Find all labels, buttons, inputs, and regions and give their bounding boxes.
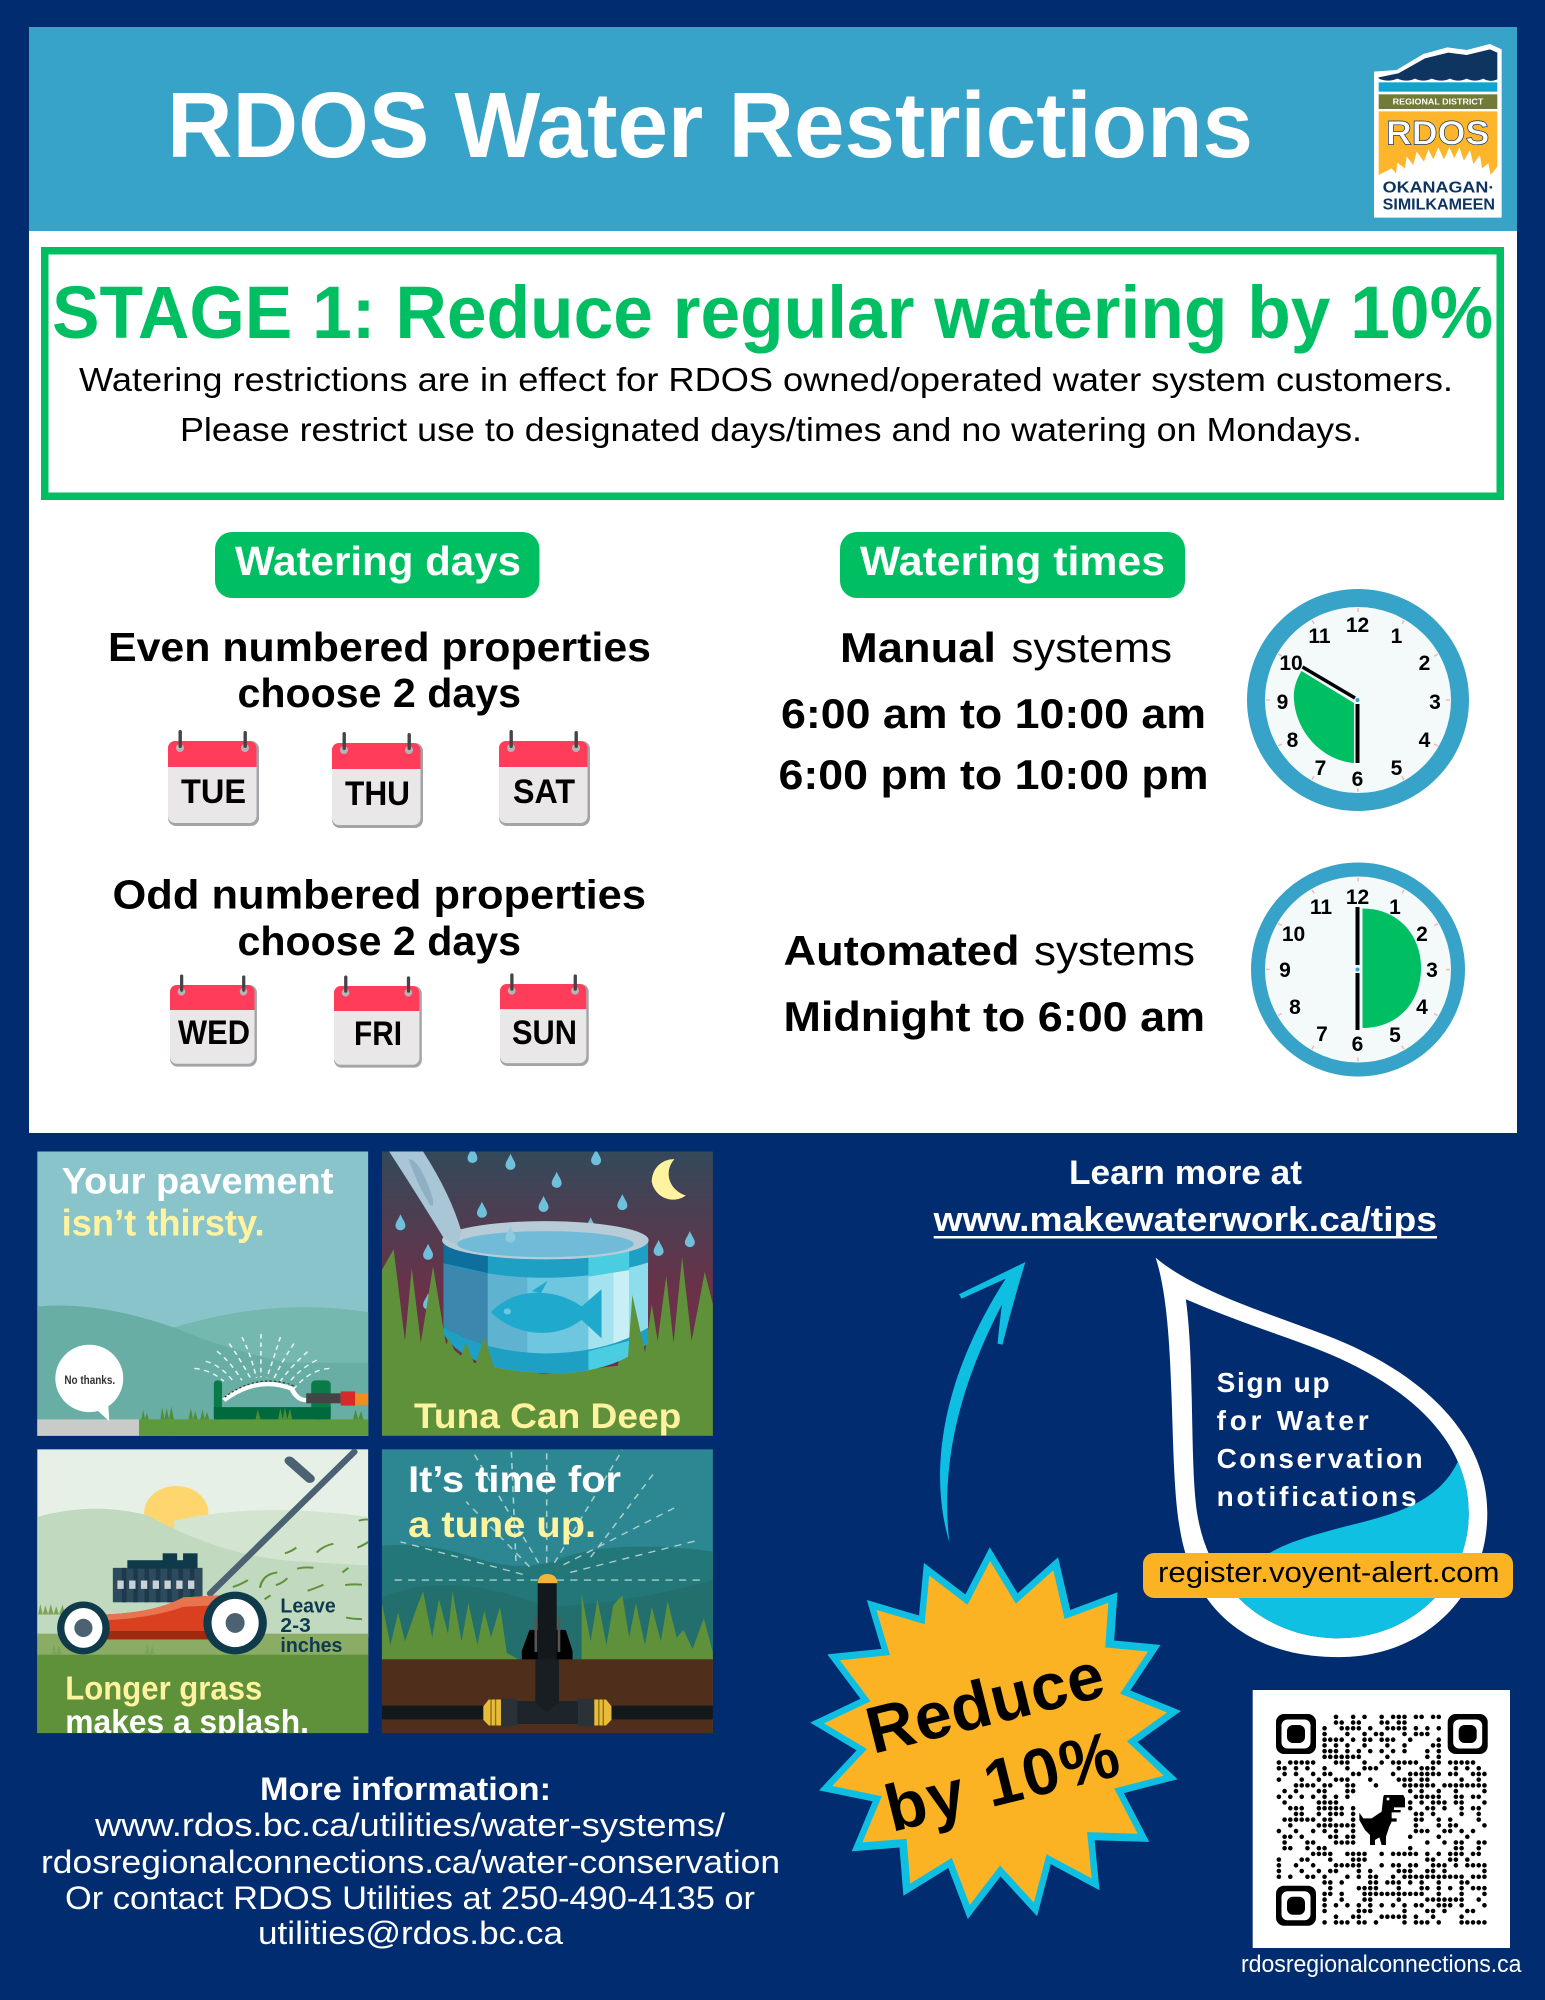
automated systems text xyxy=(784,927,1205,1040)
clock: manual systems 6 to 10: 11 xyxy=(1308,625,1331,648)
panel: stage 1 box xyxy=(45,251,1500,496)
clock: automated systems midnight to 6: 7 xyxy=(1316,1023,1328,1046)
water drop callout xyxy=(1143,1258,1513,1657)
tile: longer grass makes a splash: Longer grass xyxy=(65,1669,262,1707)
QR code xyxy=(1253,1690,1510,1948)
sign up text: for Water xyxy=(1217,1405,1369,1436)
tile: longer grass makes a splash xyxy=(37,1449,368,1740)
clock: manual systems 6 to 10: 5 xyxy=(1391,757,1403,780)
speech bubble: No thanks. xyxy=(64,1373,115,1387)
sign up text xyxy=(1217,1367,1423,1512)
manual systems text: systems xyxy=(1012,624,1172,671)
tile: your pavement isn't thirsty: isn’t thirsty. xyxy=(62,1202,265,1244)
starburst badge: by 10% xyxy=(877,1716,1126,1846)
even numbered text: choose 2 days xyxy=(238,670,521,716)
grass height note: inches xyxy=(280,1634,342,1657)
manual systems text: 6:00 pm to 10:00 pm xyxy=(778,751,1208,798)
clock: manual systems 6 to 10: 8 xyxy=(1287,729,1299,752)
more information text block: More information: xyxy=(260,1771,551,1807)
even numbered text xyxy=(108,624,651,716)
clock: manual systems 6 to 10: 6 xyxy=(1352,768,1363,791)
clock: manual systems 6 to 10: 12 xyxy=(1346,614,1369,637)
clock: automated systems midnight to 6: 6 xyxy=(1352,1033,1363,1056)
clock: automated systems midnight to 6: 12 xyxy=(1346,886,1369,909)
sign up text: notifications xyxy=(1217,1481,1417,1512)
clock: automated systems midnight to 6: 8 xyxy=(1289,996,1301,1019)
tile: time for a tune up xyxy=(382,1449,713,1733)
more information text block: rdosregionalconnections.ca/water-conservation xyxy=(41,1844,780,1880)
clock: manual systems 6 to 10: 2 xyxy=(1419,652,1430,675)
pipe and sprinkler head xyxy=(382,1574,713,1726)
starburst badge: Reduce xyxy=(858,1637,1111,1768)
calendar: Friday xyxy=(334,975,422,1068)
QR caption: rdosregionalconnections.ca xyxy=(1241,1951,1522,1978)
stage description line 2: Please restrict use to designated days/times and no watering on Mondays. xyxy=(180,412,1362,449)
register link pill: register.voyent-alert.com xyxy=(1158,1557,1500,1589)
clock: automated systems midnight to 6: 9 xyxy=(1279,959,1291,982)
calendar: Thursday xyxy=(332,732,423,828)
odd numbered text: Odd numbered properties xyxy=(112,872,646,918)
title: RDOS Water Restrictions xyxy=(167,73,1253,177)
tile: tuna can deep: Tuna Can Deep xyxy=(414,1397,681,1436)
calendar: Saturday xyxy=(499,730,590,826)
clock: automated systems midnight to 6: 5 xyxy=(1389,1024,1401,1047)
clock: manual systems 6 to 10: 4 xyxy=(1419,729,1431,752)
calendar: Saturday: SAT xyxy=(513,773,575,811)
clock: manual systems 6 to 10: 3 xyxy=(1429,691,1441,714)
stage heading: STAGE 1: Reduce regular watering by 10% xyxy=(52,271,1493,354)
calendar: Tuesday xyxy=(168,730,259,826)
clock: manual systems 6 to 10 xyxy=(1256,598,1460,802)
tile: tuna can deep xyxy=(382,1147,713,1436)
automated systems text: Midnight to 6:00 am xyxy=(784,993,1205,1040)
odd numbered text: choose 2 days xyxy=(238,918,521,964)
speech bubble xyxy=(55,1345,123,1421)
panel: watering times xyxy=(778,532,1460,1070)
more information text block: utilities@rdos.bc.ca xyxy=(258,1915,563,1951)
clock: manual systems 6 to 10: 9 xyxy=(1277,691,1288,714)
learn more text: Learn more at xyxy=(1069,1154,1302,1192)
automated systems text: systems xyxy=(1034,927,1195,974)
clock: manual systems 6 to 10: 1 xyxy=(1391,625,1403,648)
tile: time for a tune up: a tune up. xyxy=(408,1503,596,1545)
tile: longer grass makes a splash: makes a splash. xyxy=(65,1703,309,1740)
calendar: Sunday xyxy=(500,973,589,1066)
grass height note: 2-3 xyxy=(280,1614,311,1636)
clock: automated systems midnight to 6: 1 xyxy=(1389,896,1401,919)
grass height note: Leave xyxy=(280,1594,336,1617)
calendar: Friday: FRI xyxy=(354,1015,402,1053)
heading pill: watering times: Watering times xyxy=(860,538,1165,584)
logo: RDOS Okanagan-Similkameen xyxy=(1374,44,1502,218)
clock: automated systems midnight to 6: 4 xyxy=(1416,996,1428,1019)
tuna can xyxy=(389,1151,649,1377)
manual systems text: Manual xyxy=(840,624,996,671)
odd numbered text xyxy=(112,872,646,964)
tile: your pavement isn't thirsty: Your pavement xyxy=(62,1160,334,1202)
clock: automated systems midnight to 6: 10 xyxy=(1282,923,1305,946)
logo: RDOS Okanagan-Similkameen: SIMILKAMEEN xyxy=(1383,196,1495,213)
QR dino mark xyxy=(1359,1795,1405,1845)
panel: illustrated tips xyxy=(37,1147,713,1740)
main white panel xyxy=(29,231,1517,1133)
more information text block: Or contact RDOS Utilities at 250-490-4135 or xyxy=(65,1880,755,1916)
calendar: Thursday: THU xyxy=(345,775,410,813)
arrow xyxy=(940,1262,1025,1542)
grass height note xyxy=(281,1598,342,1652)
sprinkler xyxy=(194,1334,368,1419)
header banner xyxy=(29,27,1517,231)
logo: RDOS Okanagan-Similkameen: RDOS xyxy=(1386,114,1489,152)
clock: automated systems midnight to 6 xyxy=(1258,870,1458,1070)
automated systems text: Automated xyxy=(784,927,1020,974)
clock: automated systems midnight to 6: 2 xyxy=(1416,923,1428,946)
tile: time for a tune up: It’s time for xyxy=(408,1458,621,1500)
heading pill: watering days xyxy=(215,532,540,598)
more information text block: www.rdos.bc.ca/utilities/water-systems/ xyxy=(94,1807,725,1843)
clock: manual systems 6 to 10: 10 xyxy=(1279,652,1303,675)
sign up text: Conservation xyxy=(1217,1443,1423,1474)
tile: your pavement isn't thirsty xyxy=(37,1151,368,1436)
clock: automated systems midnight to 6: 3 xyxy=(1426,959,1438,982)
sign up text: Sign up xyxy=(1217,1367,1330,1398)
starburst badge xyxy=(810,1547,1181,1919)
learn more text xyxy=(933,1154,1437,1239)
clock: manual systems 6 to 10: 7 xyxy=(1315,757,1326,780)
logo: RDOS Okanagan-Similkameen: REGIONAL DISTRICT xyxy=(1393,97,1483,106)
even numbered text: Even numbered properties xyxy=(108,624,651,670)
heading pill: watering times xyxy=(840,532,1185,598)
heading pill: watering days: Watering days xyxy=(235,538,521,584)
learn more text: www.makewaterwork.ca/tips xyxy=(933,1201,1437,1239)
panel: watering days xyxy=(108,532,651,1068)
calendar: Sunday: SUN xyxy=(512,1014,577,1052)
calendar: Wednesday: WED xyxy=(178,1014,250,1052)
manual systems text: 6:00 am to 10:00 am xyxy=(781,690,1206,737)
stage description line 1: Watering restrictions are in effect for RDOS owned/operated water system customers. xyxy=(79,362,1453,399)
more information text block xyxy=(41,1771,780,1951)
logo: RDOS Okanagan-Similkameen: OKANAGAN· xyxy=(1383,180,1494,197)
lawn mower xyxy=(57,1452,354,1654)
clock: automated systems midnight to 6: 11 xyxy=(1310,896,1332,919)
manual systems text xyxy=(778,624,1208,798)
calendar: Wednesday xyxy=(170,974,257,1067)
calendar: Tuesday: TUE xyxy=(181,773,246,811)
register link pill xyxy=(1143,1553,1513,1598)
